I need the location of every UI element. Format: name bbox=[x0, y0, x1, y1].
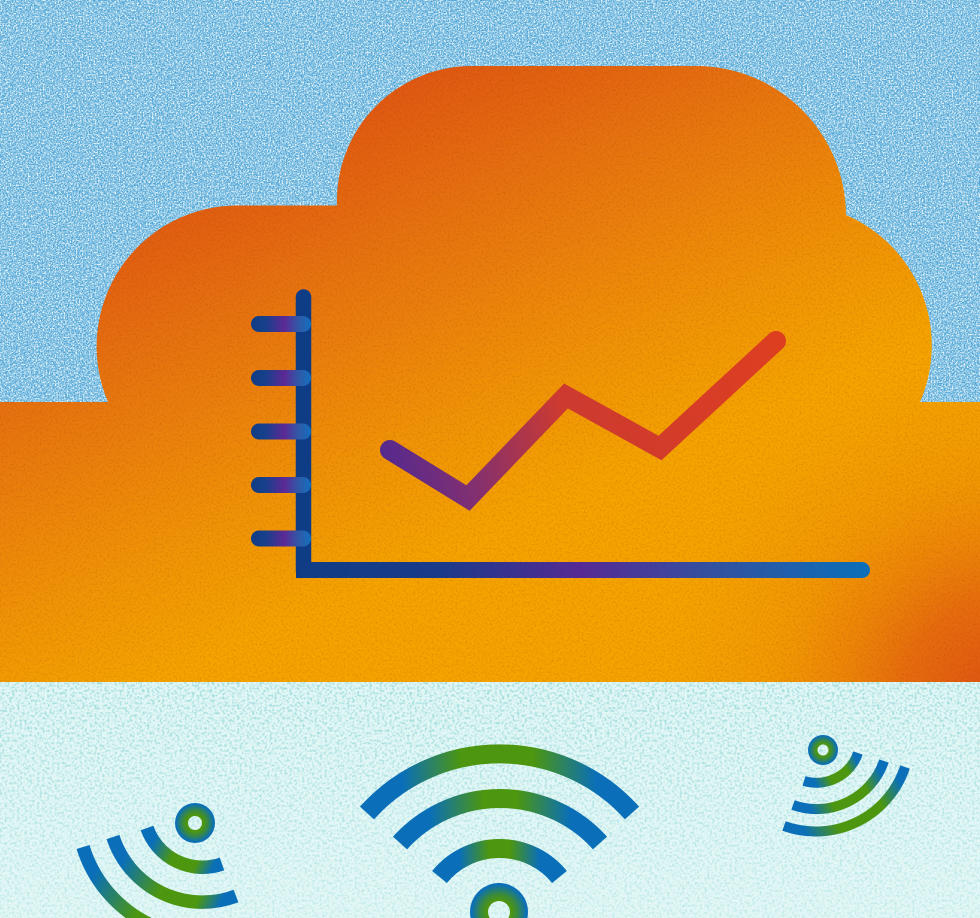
icon: right wifi signal bbox=[784, 735, 905, 832]
x axis bbox=[296, 562, 870, 578]
wifi dot bbox=[175, 803, 215, 843]
trend line bbox=[390, 341, 776, 498]
sky background bbox=[0, 0, 980, 403]
pale lower background bbox=[0, 682, 980, 918]
line chart bbox=[259, 297, 870, 578]
wifi dot bbox=[808, 735, 838, 765]
icon: large wifi signal bbox=[367, 754, 632, 918]
y axis bbox=[296, 297, 311, 570]
icon: left wifi signal bbox=[83, 803, 248, 918]
orange cloud and ground band bbox=[0, 66, 980, 682]
wifi dot bbox=[470, 883, 528, 918]
y axis tick marks bbox=[259, 324, 303, 538]
